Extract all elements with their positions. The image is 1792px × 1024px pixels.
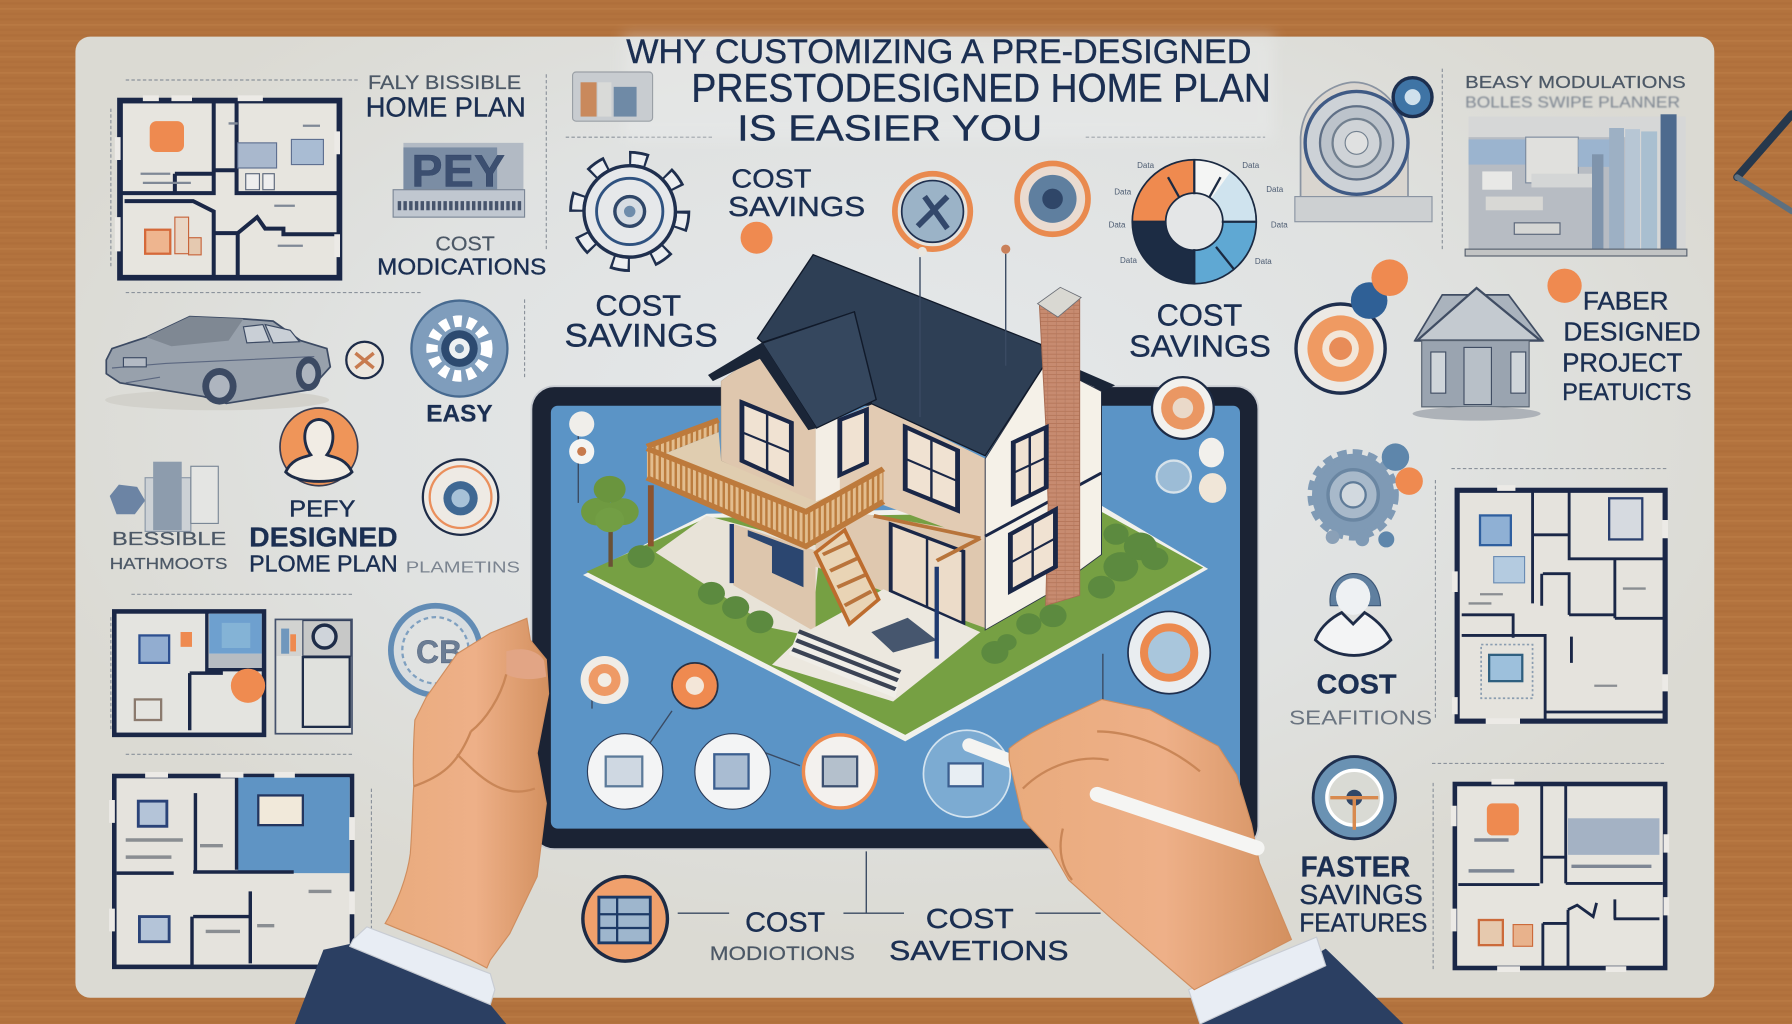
seal icon: CB [416, 634, 462, 670]
label: faster savings features: SAVINGS [1299, 879, 1423, 910]
roof [708, 255, 1115, 456]
label: designed home plan: PEFY [289, 496, 355, 522]
label: designed home plan [249, 496, 398, 576]
staircase [816, 530, 879, 624]
orange dot near house [1547, 269, 1582, 303]
monitor icon: PEY [411, 145, 505, 196]
label: cost savings center left [565, 290, 718, 353]
label: faster savings features: FEATURES [1299, 907, 1427, 937]
cabinet icon [110, 462, 218, 531]
label: cost savetions bottom: COST [926, 903, 1014, 934]
icon: small donut badge [1017, 163, 1088, 234]
label: designed home plan: DESIGNED [249, 521, 398, 552]
icon: small badge [346, 342, 383, 378]
label: cost modications [377, 232, 546, 279]
label: designed project: DESIGNED [1563, 317, 1701, 347]
small markers [918, 245, 1010, 256]
icon: large gear [577, 159, 682, 264]
patio and steps [772, 589, 980, 701]
label: cost savings center right: COST [1157, 298, 1242, 333]
chart: donut: Data [1242, 161, 1260, 170]
seal icon [391, 606, 480, 695]
label: cost savetions bottom [889, 903, 1069, 966]
label: designed home plan: PLOME PLAN [249, 550, 398, 576]
upper walls [721, 351, 1101, 630]
icon: orange ring badge [895, 174, 970, 249]
icon: concentric dial [1295, 78, 1432, 222]
chart: donut: Data [1109, 220, 1126, 229]
screen icons: feature row [587, 730, 1010, 817]
title [623, 33, 1274, 149]
floor plan top left [118, 98, 339, 278]
floor plan right upper [1455, 488, 1665, 721]
label: planetins: PLAMETINS [406, 560, 520, 577]
screen icon: right badge [1128, 611, 1210, 694]
label: cost savings center right [1129, 298, 1271, 364]
label: cost seafitions: COST [1317, 669, 1397, 700]
tablet [531, 386, 1258, 849]
lawn platform [583, 506, 1208, 741]
label: cost modications: COST [435, 232, 495, 255]
stylus over hand [1097, 794, 1257, 848]
label: easy: EASY [426, 401, 493, 428]
label: cost savetions bottom: SAVETIONS [889, 935, 1069, 966]
screen icons: top right [1152, 377, 1226, 503]
icon: bullseye with dots [1296, 259, 1408, 393]
ground floor walls [733, 506, 985, 632]
title: WHY CUSTOMIZING A PRE-DESIGNED [626, 33, 1251, 71]
label: cost seafitions: SEAFITIONS [1289, 707, 1432, 730]
label: designed project: FABER [1583, 288, 1669, 316]
label: cost modiotions bottom: COST [745, 906, 825, 937]
icon: person [1315, 574, 1391, 655]
label: cost savings top: COST [731, 163, 811, 193]
label: cost seafitions [1289, 669, 1432, 730]
label: faster savings features [1299, 852, 1427, 937]
label: cost savings top: SAVINGS [728, 191, 865, 222]
icon: grey gear cluster [1312, 443, 1423, 547]
label: bessible [110, 528, 227, 573]
windows [742, 402, 1055, 591]
label: easy modulations: BEASY MODULATIONS [1465, 72, 1686, 92]
icon: car [105, 317, 330, 410]
label: faster savings features: FASTER [1301, 852, 1411, 884]
chart: donut: Data [1137, 161, 1155, 170]
right sleeve [1189, 937, 1403, 1024]
chart: donut [1109, 160, 1288, 283]
heading: home plan: FALY BISSIBLE [368, 72, 521, 94]
label: designed project: PROJECT [1562, 347, 1682, 377]
chart: donut: Data [1120, 256, 1137, 265]
icon: person badge [280, 408, 358, 486]
screen icons: orange badges [581, 656, 718, 709]
icon: blue gear [411, 301, 507, 397]
chimney [1038, 287, 1081, 606]
callout lines [578, 254, 1103, 913]
label: cost savings top [728, 163, 865, 222]
eyeglasses on table [1737, 114, 1792, 211]
right hand [1009, 699, 1291, 990]
heading: home plan [366, 72, 526, 123]
tablet screen [551, 406, 1240, 829]
label: easy modulations [1465, 72, 1686, 111]
label: easy modulations: BOLLES SWIPE PLANNER [1465, 94, 1680, 111]
floor plan right lower [1454, 782, 1666, 969]
icon: target badge [423, 459, 498, 535]
label: cost savings center left: SAVINGS [565, 317, 718, 353]
screen icons: top left [569, 411, 594, 464]
icon: house [1413, 288, 1543, 421]
chart: donut: Data [1266, 185, 1284, 194]
chart: donut: Data [1114, 187, 1132, 196]
label: bessible: HATHMOOTS [110, 556, 227, 573]
label: designed project: PEATUICTS [1562, 379, 1691, 406]
floor plan left middle [114, 611, 352, 735]
floor plan bottom left [112, 775, 352, 967]
icon: plan badge bottom [583, 877, 667, 961]
title: IS EASIER YOU [737, 108, 1042, 149]
label: designed project [1562, 288, 1701, 406]
porch floor [656, 516, 820, 636]
house illustration [581, 255, 1208, 741]
shrubs [628, 524, 1168, 664]
label: bessible: BESSIBLE [112, 528, 226, 549]
label: cost savings center right: SAVINGS [1129, 329, 1271, 364]
label: cost modiotions bottom [710, 906, 855, 965]
balcony [647, 420, 980, 659]
icon: compass badge [1313, 757, 1395, 839]
left hand [385, 618, 549, 968]
stylus tip [969, 745, 1017, 763]
title: PRESTODESIGNED HOME PLAN [691, 67, 1271, 111]
chart: donut: Data [1271, 220, 1288, 229]
chart: donut: Data [1255, 257, 1272, 266]
heading: home plan: HOME PLAN [366, 92, 526, 123]
orange dot [741, 222, 773, 254]
building elevation chart [1465, 114, 1687, 256]
label: cost modiotions bottom: MODIOTIONS [710, 943, 855, 965]
monitor icon [393, 143, 525, 217]
tree [581, 476, 639, 567]
thumbnail: top plan card [573, 72, 653, 121]
label: cost savings center left: COST [595, 290, 681, 322]
label: cost modications: MODICATIONS [377, 253, 546, 279]
left sleeve [295, 927, 506, 1024]
